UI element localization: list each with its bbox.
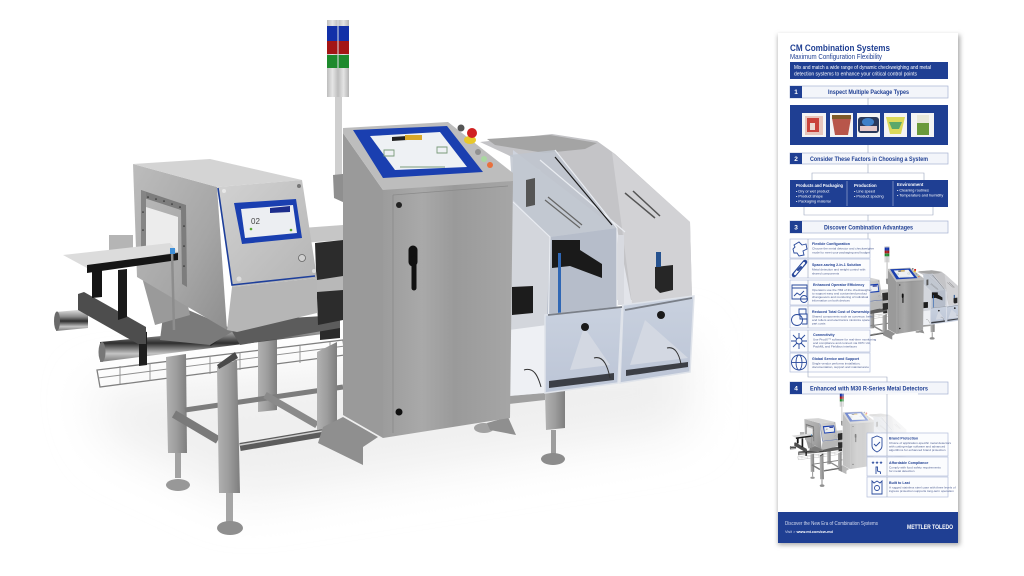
- card: brand protection: [867, 433, 952, 456]
- package thumbnail: yellow pouch: [884, 113, 907, 137]
- intro text box: Mix and match a wide range of dynamic checkweighing and metal: [794, 65, 931, 71]
- poster footer: Discover the New Era of Combination Systems: [785, 521, 878, 527]
- card: space-saving solution: shared components: [812, 272, 840, 276]
- card: connectivity: PackML and Fieldbus interfaces: [813, 344, 857, 348]
- poster panel: [778, 33, 962, 543]
- card: brand protection: algorithms for enhanced brand protection: [889, 448, 946, 452]
- factor: production: • Line speed: [854, 190, 875, 194]
- section 3 heading: [790, 221, 948, 233]
- card: built to last: [867, 477, 956, 497]
- poster footer: METTLER TOLEDO: [907, 524, 953, 531]
- section 2 heading: [790, 153, 948, 164]
- section 4 heading: Enhanced with M30 R-Series Metal Detectors: [810, 386, 928, 392]
- card: flexible configuration: [790, 239, 874, 258]
- section 2 heading: 2: [794, 156, 798, 163]
- card: reduced total cost of ownership: Shared components such as conveyor, belts: [812, 314, 873, 318]
- card: reduced total cost of ownership: Reduced Total Cost of Ownership: [812, 310, 870, 314]
- main product machine illustration: [54, 20, 694, 535]
- section 3 heading: 3: [794, 224, 798, 232]
- section 4 heading: [790, 382, 948, 394]
- card: affordable compliance: Affordable Compliance: [889, 461, 928, 465]
- package thumbnail: meat tray: [802, 113, 826, 137]
- card: affordable compliance: ★★★: [871, 460, 884, 465]
- card: reduced total cost of ownership: and rollers and electronics minimize spare: [812, 318, 870, 322]
- poster subtitle: Maximum Configuration Flexibility: [790, 52, 882, 61]
- card: reduced total cost of ownership: part costs: [812, 322, 826, 326]
- card: enhanced operator efficiency: information on both devices: [812, 298, 850, 302]
- card: flexible configuration: Flexible Configuration: [812, 242, 850, 246]
- floor shadow: [90, 340, 690, 500]
- factor: environment: Environment: [897, 182, 924, 187]
- card: affordable compliance: [867, 457, 948, 476]
- card: global service and support: documentation, support and maintenance: [812, 365, 869, 369]
- card: space-saving solution: Metal detection and weight control with: [812, 268, 866, 272]
- card: reduced total cost of ownership: [790, 306, 873, 328]
- advantages list: [790, 239, 877, 372]
- card: flexible configuration: model to meet your packaging and budget: [812, 250, 870, 254]
- card: enhanced operator efficiency: changeovers and monitoring of individual: [812, 295, 869, 299]
- card: connectivity: [790, 330, 877, 352]
- package types panel: [790, 105, 948, 145]
- factors panel: [790, 180, 948, 207]
- poster title: CM Combination Systems: [790, 43, 890, 54]
- card: global service and support: Single vendor performs installation,: [812, 362, 860, 366]
- card: space-saving solution: Space-saving 2-in-1 Solution: [812, 263, 861, 267]
- card: built to last: A rugged stainless steel case with three levels of: [889, 486, 956, 490]
- section 1 heading: Inspect Multiple Package Types: [828, 89, 909, 96]
- poster shadow: [778, 35, 960, 545]
- package thumbnail: green carton: [911, 113, 934, 137]
- factor: production: [854, 183, 884, 198]
- card: enhanced operator efficiency: Enhanced Operator Efficiency: [813, 283, 864, 287]
- card: brand protection: with cutting-edge software and advanced: [889, 444, 946, 448]
- factor: products and packaging: • Product shape: [796, 194, 823, 198]
- section 2 heading: Consider These Factors in Choosing a System: [810, 156, 928, 163]
- card: affordable compliance: Comply with food safety requirements: [889, 466, 941, 470]
- card: built to last: ingress protection supports long-term operation: [889, 489, 954, 493]
- M30 features list: [867, 433, 956, 497]
- factor: products and packaging: • Dry or wet product: [796, 190, 830, 194]
- factor: products and packaging: • Packaging material: [796, 200, 831, 204]
- card: space-saving solution: [790, 259, 870, 278]
- package thumbnail: blue tray: [857, 113, 880, 137]
- card: connectivity: Use ProdX™ software for real-time monitoring: [813, 338, 877, 342]
- section 3 heading: Discover Combination Advantages: [824, 224, 913, 232]
- card: flexible configuration: Choose the metal detector and checkweigher: [812, 246, 874, 250]
- intro text box: [790, 62, 948, 79]
- factor: environment: [897, 182, 943, 198]
- small combination system image: [870, 246, 958, 340]
- card: brand protection: Brand Protection: [889, 436, 918, 440]
- card: brand protection: Choice of application-specific metal detectors: [889, 441, 952, 445]
- card: affordable compliance: for metal detection: [889, 469, 915, 473]
- factor: environment: • Temperature and humidity: [897, 194, 943, 198]
- card: global service and support: [790, 353, 870, 372]
- section 1 heading: [790, 86, 948, 98]
- package thumbnail: tub: [830, 113, 853, 137]
- card: connectivity: Connectivity: [813, 333, 835, 337]
- intro text box: detection systems to enhance your critical control points: [794, 72, 917, 78]
- section 1 heading: 1: [794, 89, 798, 96]
- factor: products and packaging: Products and Packaging: [796, 183, 843, 188]
- poster footer: [778, 512, 958, 543]
- faded metal detector image: [790, 393, 918, 491]
- poster footer: Visit > www.mt.com/cw-md: [785, 530, 833, 534]
- card: enhanced operator efficiency: Operators use the HMI of the checkweigher: [812, 288, 872, 292]
- card: enhanced operator efficiency: [790, 280, 872, 305]
- card: enhanced operator efficiency: to support easy and customized product: [812, 292, 867, 296]
- card: global service and support: Global Service and Support: [812, 357, 860, 361]
- factor: production: Production: [854, 183, 877, 188]
- card: built to last: Built to Last: [889, 481, 911, 485]
- factor: environment: • Cleaning routines: [897, 188, 929, 192]
- factor: products and packaging: [796, 183, 843, 204]
- section 4 heading: 4: [794, 386, 798, 392]
- factor: production: • Product spacing: [854, 194, 884, 198]
- card: connectivity: and compliance and connect via OPC UA,: [813, 341, 871, 345]
